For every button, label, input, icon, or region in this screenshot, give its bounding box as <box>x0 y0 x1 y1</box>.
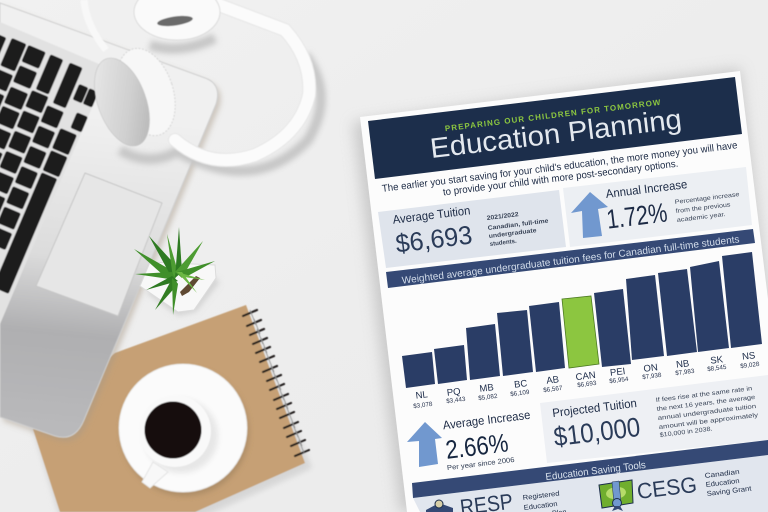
headband edge <box>175 5 309 160</box>
panel: projected tuition: If fees rise at the same rate in <box>655 385 753 404</box>
panel: education saving tools: Saving Grant <box>706 486 752 498</box>
panel: average increase: Average Increase <box>442 408 531 432</box>
panel: projected tuition: the next 16 years, the average <box>656 394 756 413</box>
bar labels: $7,938 <box>642 372 662 381</box>
panel: education saving tools: Education <box>523 501 558 512</box>
bar labels: $5,082 <box>478 393 498 402</box>
highlighted bar: Canada <box>562 296 599 368</box>
panel: average tuition <box>378 190 566 268</box>
panel: projected tuition: amount will be approximately <box>658 412 760 431</box>
coffee <box>144 402 202 458</box>
plant <box>134 227 220 316</box>
bar labels: $8,545 <box>707 364 727 373</box>
bar labels: NL <box>415 389 428 402</box>
cup body <box>139 395 211 467</box>
panel: education saving tools: Education Saving Tools <box>545 460 646 483</box>
bar labels: NS <box>741 350 756 363</box>
panel: annual increase: 1.72% <box>605 197 669 235</box>
tools heading band <box>412 440 768 498</box>
icon: RESP coin and graduation cap <box>426 500 453 512</box>
panel: education saving tools: Education <box>705 478 740 489</box>
headphone shadow <box>120 38 321 171</box>
chart heading band: Weighted average undergraduate tuition fees for Canadian full-time students <box>401 234 740 287</box>
panel: projected tuition: $10,000 in 2038. <box>659 426 713 439</box>
bar labels: $6,954 <box>609 376 629 385</box>
panel: average tuition: $6,693 <box>394 219 474 259</box>
bar labels: $6,109 <box>510 389 530 398</box>
bar labels: PQ <box>446 386 461 399</box>
bar chart <box>402 252 762 410</box>
panel: projected tuition <box>540 375 768 463</box>
poster shadow <box>353 68 768 512</box>
panel: annual increase: from the previous <box>675 201 731 215</box>
arrow: annual increase <box>571 192 608 238</box>
icon: CESG money and ribbon <box>599 480 633 511</box>
saucer shadow <box>121 368 249 496</box>
cup shadow <box>144 399 218 473</box>
intro text: The earlier you start saving for your child's education, the more money you will have <box>381 140 738 195</box>
bar labels: $6,693 <box>577 380 597 389</box>
bar labels: NB <box>675 358 690 371</box>
panel: education saving tools: Canadian <box>704 469 740 480</box>
panel: annual increase: academic year. <box>676 211 726 224</box>
intro text: to provide your child with more post-secondary options. <box>442 159 679 198</box>
poster <box>353 68 768 512</box>
laptop <box>0 1 221 441</box>
panel: average increase: Per year since 2006 <box>447 457 515 472</box>
bar labels: BC <box>513 378 528 391</box>
poster sheet <box>360 71 768 512</box>
bar labels: $3,078 <box>413 401 433 410</box>
bar labels: PEI <box>609 366 626 379</box>
headband <box>175 5 309 160</box>
panel: average tuition: Average Tuition <box>392 203 471 227</box>
arrow: average increase <box>407 422 442 467</box>
header band <box>368 77 742 179</box>
saucer <box>119 364 247 492</box>
panel: projected tuition: annual undergraduate tuition <box>657 403 757 422</box>
lower earcup cushion <box>106 41 186 143</box>
keyboard <box>0 1 109 324</box>
plant pot shadow <box>145 270 220 316</box>
headphones <box>84 0 321 171</box>
header kicker: PREPARING OUR CHILDREN FOR TOMORROW <box>444 98 661 133</box>
lower earcup disc <box>84 51 160 153</box>
bar labels: $6,567 <box>543 385 563 394</box>
panel: average tuition: undergraduate <box>488 227 537 240</box>
panel: average tuition: Canadian, full-time <box>487 218 549 232</box>
panel: annual increase: Percentage increase <box>674 191 740 206</box>
panel: projected tuition: $10,000 <box>552 412 642 452</box>
notebook spiral binding <box>243 310 309 456</box>
bar labels: CAN <box>575 370 596 383</box>
bar labels: SK <box>710 354 724 367</box>
trackpad <box>36 173 162 316</box>
bar labels: $3,443 <box>446 396 466 405</box>
bar labels: $7,983 <box>675 368 695 377</box>
panel: average tuition: 2021/2022 <box>486 211 520 222</box>
panel: education saving tools: Registered <box>522 491 560 502</box>
bar labels: $9,028 <box>740 361 760 370</box>
panel: average tuition: students. <box>489 238 517 248</box>
notebook <box>33 305 312 512</box>
plant pot <box>140 262 216 312</box>
top earcup <box>134 0 220 40</box>
cup handle <box>142 462 168 488</box>
panel: education saving tools <box>412 440 768 512</box>
panel: projected tuition: Projected Tuition <box>551 396 638 420</box>
panel: annual increase <box>563 167 752 247</box>
title: Education Planning <box>428 103 683 164</box>
coffee cup <box>119 364 249 496</box>
panel: average increase: 2.66% <box>444 427 510 465</box>
bar labels <box>413 350 760 410</box>
bar labels: MB <box>479 382 494 395</box>
bar labels: ON <box>643 362 659 375</box>
panel: annual increase: Annual Increase <box>605 177 688 201</box>
plant leaves <box>134 227 215 315</box>
panel: education saving tools: CESG <box>636 472 698 504</box>
panel: average increase <box>407 408 531 472</box>
bar labels: AB <box>546 374 560 387</box>
